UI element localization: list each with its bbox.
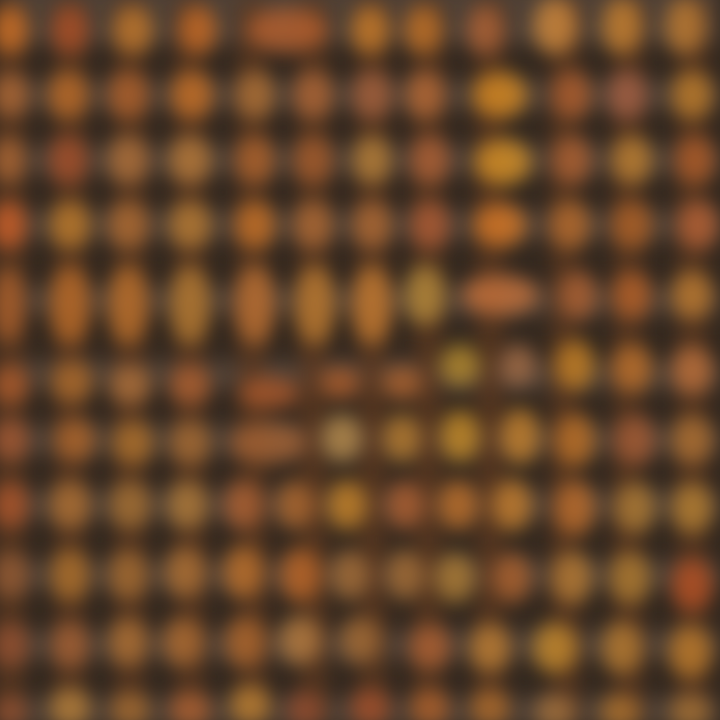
row 10 <box>0 616 711 678</box>
row 9 <box>0 546 712 611</box>
row 3 <box>0 136 714 185</box>
row 8 <box>0 479 712 535</box>
row 7 <box>0 408 712 466</box>
row 2 <box>0 71 712 119</box>
row 6 <box>0 340 712 409</box>
row 4 <box>0 201 718 249</box>
row 5 <box>0 265 712 345</box>
row 11 <box>0 685 710 720</box>
row 1 <box>0 0 705 54</box>
